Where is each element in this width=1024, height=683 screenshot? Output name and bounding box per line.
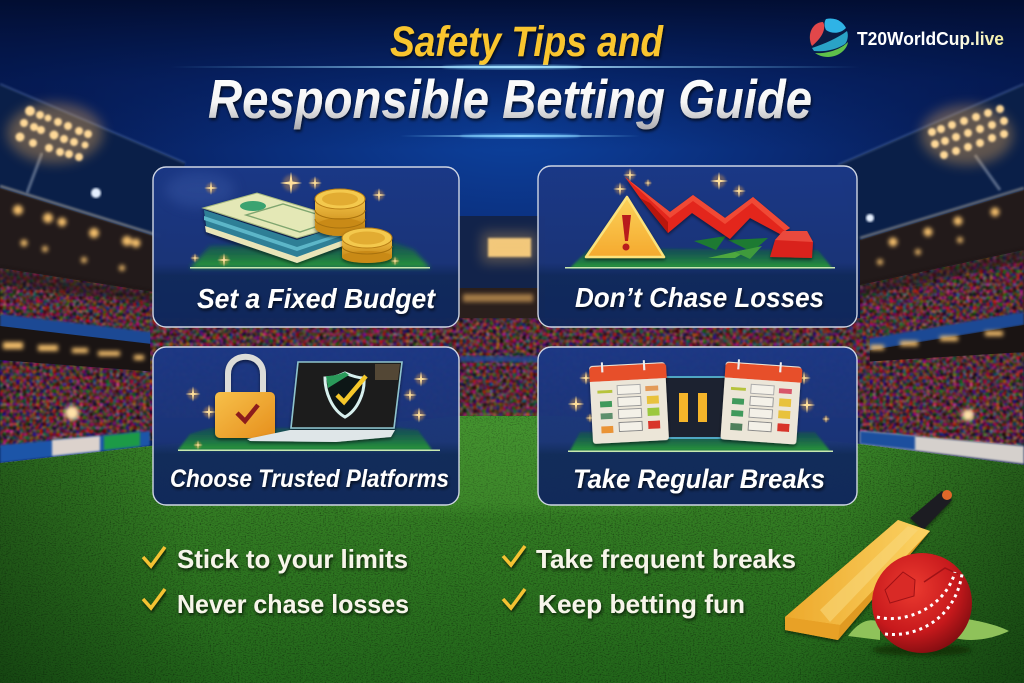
- sparkles: [613, 168, 746, 198]
- background: left stadium stand: [0, 84, 185, 463]
- cricket ball: [872, 553, 972, 656]
- tip: stick to limits: Stick to your limits: [177, 544, 408, 574]
- panel label: Don’t Chase Losses: [575, 282, 824, 313]
- panel: Set a Fixed Budget: [153, 167, 459, 327]
- checklist: right column: [503, 544, 796, 619]
- background: centre stand and scoreboard: [150, 216, 870, 418]
- icon: gold coin stack front: [342, 228, 392, 263]
- icon: pause screen: [663, 377, 727, 438]
- background: right stadium stand: [838, 84, 1024, 464]
- icon: check: [503, 589, 525, 608]
- tip: keep betting fun: Keep betting fun: [538, 589, 745, 619]
- panel border: [153, 167, 459, 327]
- panel: Take Regular Breaks: [538, 347, 857, 505]
- icon: laptop with shield: [247, 362, 402, 442]
- title glow line: [170, 64, 860, 70]
- panel border: [538, 347, 857, 505]
- icon: stack of banknotes: [203, 193, 353, 263]
- green ground: [178, 428, 432, 450]
- subtitle glow line: [400, 134, 640, 138]
- logo wordmark: T20WorldCup.live: [857, 29, 1004, 49]
- icon: red falling chart arrow: [625, 177, 813, 258]
- icon: check: [503, 546, 525, 565]
- checklist: left column: [143, 544, 409, 619]
- title: Responsible Betting Guide: Responsible Betting Guide: [208, 68, 812, 130]
- logo: T20WorldCup.live: [809, 19, 1004, 57]
- panel label: Set a Fixed Budget: [197, 283, 437, 314]
- background: cricket field grass: [0, 416, 1024, 683]
- title: Safety Tips and: Safety Tips and: [390, 18, 664, 66]
- icon: globe logo: [809, 19, 848, 57]
- sparkles: [190, 172, 400, 267]
- background: right floodlight: [866, 105, 1013, 222]
- panel border: [153, 347, 459, 505]
- background: night sky: [0, 0, 1024, 470]
- green ground: [570, 248, 832, 268]
- icon: gold coin stack back: [315, 189, 365, 236]
- icon: leaves: [694, 236, 768, 259]
- icon: calendar left: [589, 359, 670, 444]
- icon: check: [143, 547, 165, 566]
- sparkles: [185, 371, 429, 450]
- icon: warning triangle: [586, 197, 664, 257]
- background: left floodlight: [7, 103, 103, 198]
- tip: never chase losses: Never chase losses: [177, 589, 409, 619]
- tip: frequent breaks: Take frequent breaks: [536, 544, 796, 574]
- leaves: [848, 618, 1009, 640]
- panel: Don't Chase Losses: [538, 166, 857, 327]
- green ground: [190, 240, 430, 268]
- panel: Choose Trusted Platforms: [153, 347, 459, 505]
- icon: calendar right: [720, 358, 803, 445]
- cricket bat: [785, 490, 952, 640]
- icon: cricket bat and ball: [785, 490, 1009, 656]
- icon: padlock: [215, 357, 275, 438]
- panel label: Take Regular Breaks: [573, 464, 825, 494]
- panel label: Choose Trusted Platforms: [170, 465, 449, 493]
- background: stand lights: [3, 205, 1003, 421]
- green ground: [570, 432, 830, 451]
- panel border: [538, 166, 857, 327]
- sparkles: [568, 371, 830, 423]
- icon: check: [143, 589, 165, 608]
